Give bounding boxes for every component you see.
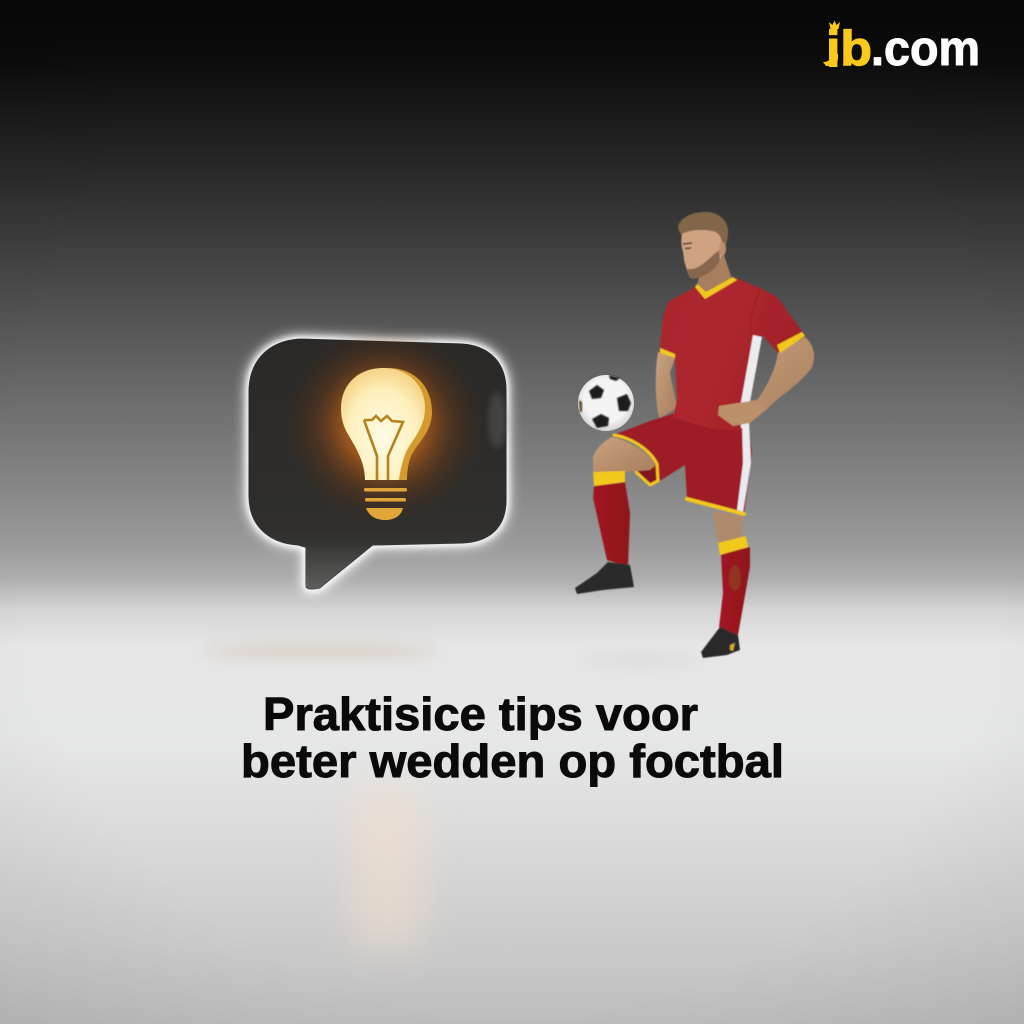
hand [718,400,766,426]
jersey side stripe [741,335,762,428]
under-short inner [635,463,658,486]
bulb filament [364,416,403,480]
standing boot [701,627,740,658]
bulb glass [341,368,425,480]
bubble right highlight [488,392,506,448]
boot detail [730,643,735,651]
hair [678,212,728,245]
shorts trim [614,435,744,514]
logo com: .com [871,22,980,76]
player [575,212,814,658]
shorts side stripe [737,420,751,512]
bubble outer glow [248,338,507,590]
back arm [656,352,677,418]
beard stubble [687,250,720,278]
head [681,224,725,278]
icon: crown [829,20,840,29]
speech bubble with light bulb [248,325,507,590]
raised sock [593,482,630,567]
floor shadow of player [580,657,700,663]
neck [697,255,732,294]
raised thigh [593,437,656,472]
logo j tail [823,54,838,66]
ear [719,242,726,256]
standing shin [712,511,743,543]
sock emblem [729,565,741,591]
bubble inner glow [248,338,507,590]
raised sock band [593,471,625,486]
logo [823,20,978,67]
standing sock [719,547,750,635]
jersey collar [695,277,737,299]
floor shadow of bubble [200,647,440,655]
eye and brow [683,243,692,248]
front arm [718,337,814,426]
title line 2: beter wedden op foctbal [241,735,784,787]
title line 1: Praktisice tips voor [263,688,698,740]
bubble tail shading [306,546,371,589]
raised boot [575,562,634,594]
standing sock band [718,536,748,555]
ball patches [579,375,631,428]
jersey [660,278,805,430]
sleeve cuffs [777,332,805,353]
bulb halo [284,325,484,525]
logo jb: jb [825,22,872,76]
bulb gold rim [368,368,432,480]
soccer ball [578,375,634,431]
bubble body [248,338,507,590]
floor light reflection [352,770,424,970]
title [241,688,784,787]
bulb screw base [364,488,407,520]
shorts [613,414,752,515]
jersey sleeve seam [750,290,760,336]
